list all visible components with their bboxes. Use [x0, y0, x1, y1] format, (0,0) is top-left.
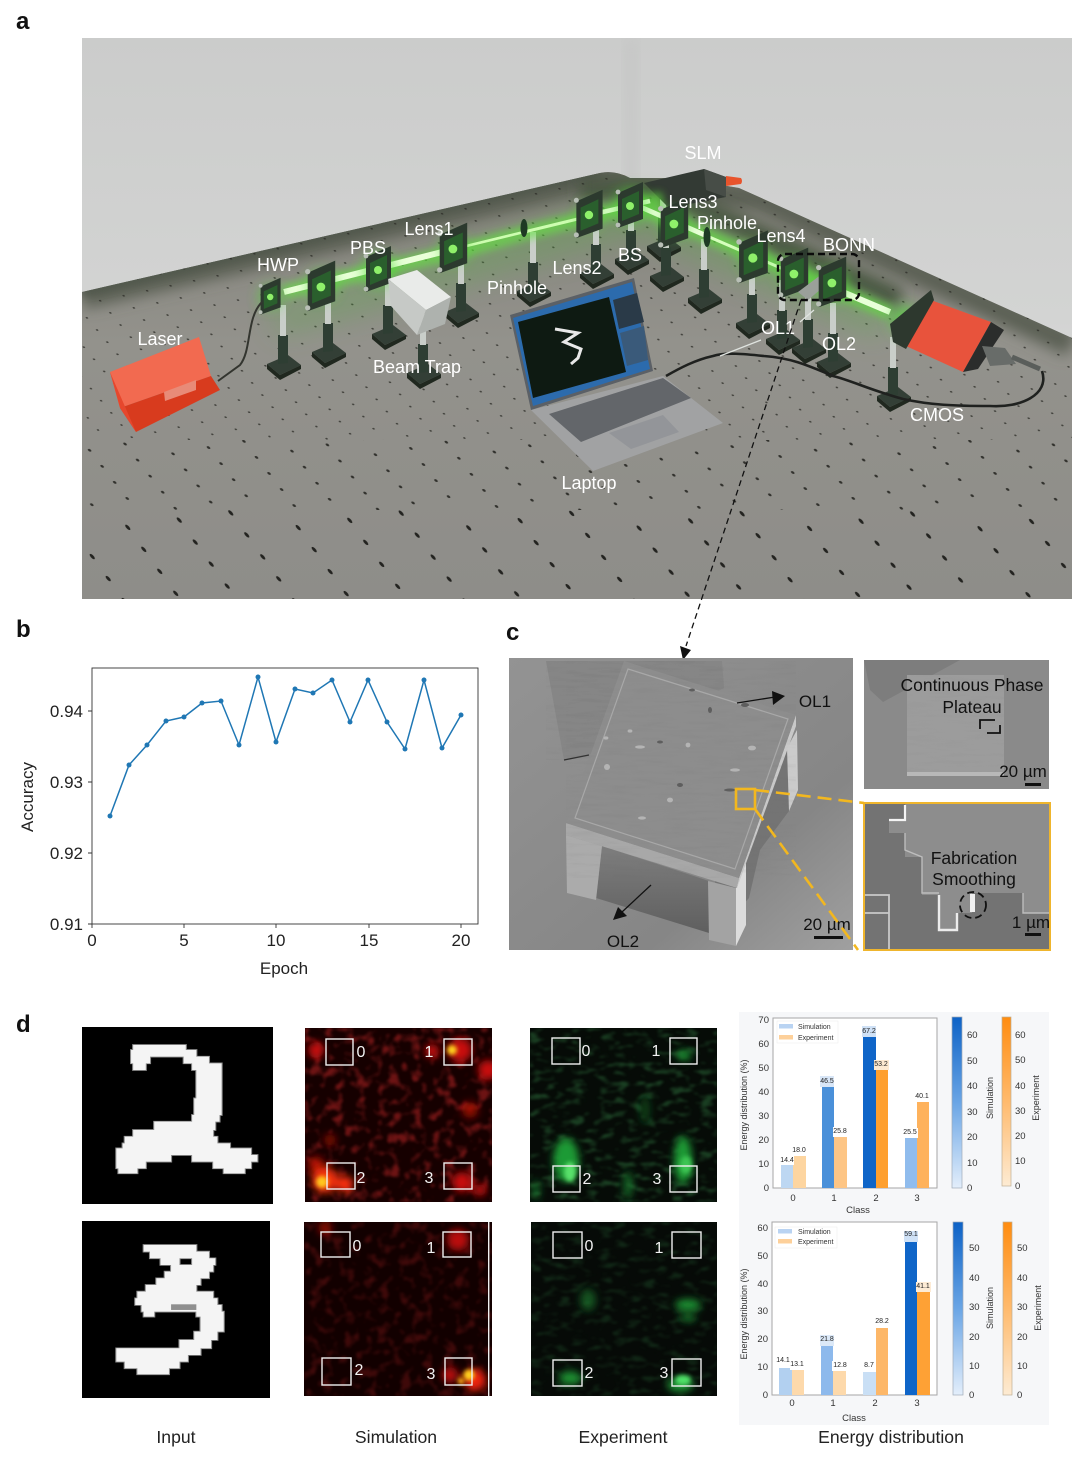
axis ticks: 40 — [757, 1279, 768, 1290]
column captions: Input — [156, 1427, 196, 1447]
panel c: top-right SEM, continuous phase plateau — [864, 660, 1049, 789]
scale bar 20 um: 20 µm — [803, 915, 851, 934]
colorbar experiment: 50 — [1017, 1243, 1028, 1254]
experiment class boxes digit 3: 0 — [585, 1238, 594, 1255]
experiment class boxes digit 3: 1 — [655, 1240, 664, 1257]
fabrication label: Fabrication — [931, 848, 1017, 868]
axis ticks: 10 — [758, 1159, 769, 1170]
colorbar simulation: 50 — [969, 1243, 980, 1254]
x axis tick labels: 0 — [87, 931, 97, 950]
experiment class boxes digit 2: 0 — [582, 1043, 591, 1060]
x axis tick labels: 5 — [179, 931, 189, 950]
scene labels: Laser — [137, 329, 183, 349]
simulation class boxes digit 2 — [326, 1039, 472, 1189]
colorbar simulation: 0 — [969, 1390, 974, 1401]
scene labels: OL1 — [761, 318, 795, 338]
icon: beam trap — [388, 270, 451, 335]
legend: Experiment — [798, 1035, 833, 1042]
simulation class boxes digit 3: 2 — [355, 1362, 364, 1379]
colorbar simulation: 30 — [969, 1302, 980, 1313]
value labels digit 2 — [780, 1026, 929, 1165]
experiment class boxes digit 2: 1 — [652, 1043, 661, 1060]
BONN dashed box — [778, 254, 859, 300]
value labels digit 3: 12.8 — [833, 1362, 847, 1369]
axis ticks: 50 — [757, 1251, 768, 1262]
value labels digit 2: 46.5 — [820, 1078, 834, 1085]
scale bar 20 um: 20 µm — [999, 762, 1047, 781]
icon: laser — [110, 302, 262, 432]
colorbar experiment: Experiment — [1031, 1075, 1041, 1121]
colorbar experiment: 10 — [1015, 1156, 1026, 1167]
colorbar experiment: 30 — [1015, 1106, 1026, 1117]
bar chart: digit 2 energy distribution — [739, 1015, 1041, 1216]
x axis tick labels: 15 — [360, 931, 378, 950]
label OL1: OL1 — [799, 692, 831, 711]
colorbar experiment: 0 — [1017, 1390, 1022, 1401]
axis ticks — [757, 1223, 768, 1401]
icon: SLM — [644, 169, 742, 208]
value labels digit 2: 25.8 — [833, 1128, 847, 1135]
y axis title: Accuracy — [18, 762, 37, 832]
scene labels: PBS — [350, 238, 386, 258]
scene labels: Beam Trap — [373, 357, 461, 377]
value labels digit 2: 25.5 — [903, 1129, 917, 1136]
scene labels: Pinhole — [697, 213, 757, 233]
accuracy line — [108, 674, 464, 818]
colorbar simulation — [952, 1017, 995, 1194]
colorbar experiment: 30 — [1017, 1302, 1028, 1313]
axis ticks: 70 — [758, 1015, 769, 1026]
bar chart: digit 3 energy distribution: Energy distribution (%) — [739, 1268, 749, 1360]
scene labels: Laptop — [561, 473, 617, 493]
panel c: bottom-right SEM inset, fabrication smoothing — [864, 803, 1050, 950]
simulation class boxes digit 3: 0 — [353, 1238, 362, 1255]
optical posts and bases — [267, 187, 911, 412]
colorbar experiment: 40 — [1017, 1273, 1028, 1284]
dashed circle — [960, 892, 986, 918]
colorbar simulation: 10 — [969, 1361, 980, 1372]
plateau label: Plateau — [942, 697, 1002, 717]
column captions — [156, 1427, 964, 1447]
surface debris on chip — [604, 688, 756, 820]
scene labels: CMOS — [910, 405, 964, 425]
plateau label — [900, 675, 1044, 717]
colorbar simulation: 0 — [967, 1183, 972, 1194]
panel label: b: b — [16, 616, 31, 643]
value labels digit 2: 67.2 — [862, 1028, 876, 1035]
colorbar simulation: 60 — [967, 1030, 978, 1041]
axis ticks: 10 — [757, 1362, 768, 1373]
axis ticks: 50 — [758, 1063, 769, 1074]
axis ticks: 20 — [758, 1135, 769, 1146]
colorbar experiment — [1002, 1017, 1041, 1192]
colorbar simulation: Simulation — [985, 1077, 995, 1119]
colorbar experiment — [1003, 1222, 1043, 1401]
axis ticks: 0 — [764, 1183, 769, 1194]
simulation heatmap digit 3 — [304, 1222, 492, 1396]
input digit 2 — [82, 1027, 273, 1204]
experiment heatmap digit 3 — [531, 1222, 717, 1396]
experiment class boxes digit 3: 3 — [660, 1365, 669, 1382]
green laser beam — [284, 199, 890, 313]
simulation class boxes digit 3: 1 — [427, 1240, 436, 1257]
bar chart: digit 2 energy distribution: Energy distribution (%) — [739, 1059, 749, 1151]
x axis title: Epoch — [260, 959, 308, 978]
bar chart: digit 3 energy distribution: Class — [842, 1413, 866, 1424]
value labels digit 2: 14.4 — [780, 1157, 794, 1164]
simulation class boxes digit 2: 2 — [357, 1170, 366, 1187]
legend: Simulation — [798, 1024, 831, 1031]
bar chart: digit 2 energy distribution: Class — [846, 1205, 870, 1216]
axis ticks: 60 — [757, 1223, 768, 1234]
colorbar simulation — [953, 1222, 995, 1401]
y axis tick labels: 0.92 — [50, 844, 83, 863]
colorbar simulation: 40 — [969, 1273, 980, 1284]
simulation class boxes digit 2: 3 — [425, 1170, 434, 1187]
panel label: a: a — [16, 8, 30, 35]
scene labels: BONN — [823, 235, 875, 255]
scene labels: BS — [618, 245, 642, 265]
zoom indicator box and dashed connectors — [736, 789, 864, 950]
colorbar simulation: 30 — [967, 1107, 978, 1118]
simulation class boxes digit 3: 3 — [427, 1366, 436, 1383]
panel a: optical setup scene — [82, 38, 1072, 599]
colorbar experiment: 20 — [1015, 1131, 1026, 1142]
experiment class boxes digit 2: 3 — [653, 1171, 662, 1188]
y axis tick labels: 0.93 — [50, 773, 83, 792]
scale bar 1 um: 1 µm — [1012, 913, 1050, 932]
icon: CMOS camera — [666, 290, 1043, 406]
colorbar simulation: 20 — [967, 1132, 978, 1143]
value labels digit 2: 18.0 — [792, 1147, 806, 1154]
bars digit 2 — [781, 1037, 929, 1188]
colorbar experiment: 0 — [1015, 1181, 1020, 1192]
panel label: c: c — [506, 619, 519, 646]
value labels digit 3: 59.1 — [904, 1231, 918, 1238]
fabrication label: Smoothing — [932, 869, 1016, 889]
colorbar experiment: 60 — [1015, 1030, 1026, 1041]
plateau label: Continuous Phase — [900, 675, 1044, 695]
colorbar simulation: 20 — [969, 1332, 980, 1343]
value labels digit 2: 40.1 — [915, 1093, 929, 1100]
value labels digit 3: 13.1 — [790, 1361, 804, 1368]
label OL2: OL2 — [607, 932, 639, 951]
column captions: Experiment — [579, 1427, 668, 1447]
scene labels: OL2 — [822, 334, 856, 354]
y axis tick labels — [50, 702, 83, 934]
scene labels: Lens2 — [552, 258, 602, 278]
y axis tick labels: 0.94 — [50, 702, 83, 721]
experiment class boxes digit 2 — [552, 1038, 697, 1192]
value labels digit 3 — [776, 1231, 931, 1372]
scene labels — [137, 143, 964, 493]
arrow to OL1 — [737, 691, 785, 705]
axis ticks: 20 — [757, 1334, 768, 1345]
panel label: d: d — [16, 1011, 31, 1038]
bar chart: digit 3 energy distribution — [739, 1222, 1043, 1424]
bars digit 3 — [779, 1242, 930, 1395]
fabrication label — [931, 848, 1017, 889]
legend — [777, 1021, 838, 1043]
panel d: energy distribution background — [739, 1012, 1049, 1425]
legend — [775, 1227, 837, 1248]
bar chart: digit 3 energy distribution: 3 — [914, 1398, 920, 1409]
value labels digit 3: 14.1 — [776, 1357, 790, 1364]
value labels digit 3: 28.2 — [875, 1318, 889, 1325]
scene labels: Lens1 — [404, 219, 454, 239]
axis ticks: 30 — [758, 1111, 769, 1122]
colorbar experiment: 50 — [1015, 1055, 1026, 1066]
arrow to OL2 — [613, 885, 651, 920]
axis ticks — [758, 1015, 769, 1194]
panel b: accuracy line chart — [18, 668, 478, 978]
simulation class boxes digit 2: 1 — [425, 1044, 434, 1061]
legend: Simulation — [798, 1229, 831, 1236]
scene labels: HWP — [257, 255, 299, 275]
x axis tick labels: 10 — [267, 931, 285, 950]
optical mounts — [259, 182, 919, 334]
colorbar simulation: 50 — [967, 1056, 978, 1067]
input digit 3 — [82, 1221, 270, 1398]
colorbar experiment: 40 — [1015, 1081, 1026, 1092]
colorbar simulation: Simulation — [985, 1287, 995, 1329]
panel c: main SEM image — [509, 658, 853, 951]
bar chart: digit 2 energy distribution: 2 — [873, 1193, 879, 1204]
bar chart: digit 2 energy distribution: 0 — [790, 1193, 796, 1204]
scene labels: Pinhole — [487, 278, 547, 298]
value labels digit 3: 41.1 — [916, 1283, 930, 1290]
value labels digit 3: 21.8 — [820, 1336, 834, 1343]
column captions: Simulation — [355, 1427, 437, 1447]
column captions: Energy distribution — [818, 1427, 964, 1447]
colorbar simulation: 10 — [967, 1158, 978, 1169]
experiment class boxes digit 3: 2 — [585, 1365, 594, 1382]
simulation class boxes digit 3 — [321, 1232, 472, 1385]
colorbar experiment: 10 — [1017, 1361, 1028, 1372]
y axis tick labels: 0.91 — [50, 915, 83, 934]
axis ticks: 40 — [758, 1087, 769, 1098]
scene labels: Lens3 — [668, 192, 718, 212]
scene labels: SLM — [684, 143, 722, 163]
colorbar experiment: Experiment — [1033, 1285, 1043, 1331]
bar chart: digit 3 energy distribution: 0 — [789, 1398, 795, 1409]
experiment heatmap digit 2 — [530, 1028, 717, 1202]
bar chart: digit 2 energy distribution: 3 — [914, 1193, 920, 1204]
legend: Experiment — [798, 1239, 833, 1246]
x axis tick labels — [87, 931, 470, 950]
experiment class boxes digit 2: 2 — [583, 1171, 592, 1188]
scene labels: Lens4 — [756, 226, 806, 246]
bar chart: digit 2 energy distribution: 1 — [831, 1193, 837, 1204]
bar chart: digit 3 energy distribution: 2 — [872, 1398, 878, 1409]
axis ticks: 0 — [763, 1390, 768, 1401]
icon: laptop — [510, 278, 723, 471]
dashed arrow from BONN to panel c — [680, 300, 801, 660]
experiment class boxes digit 3 — [553, 1232, 701, 1386]
value labels digit 3: 8.7 — [864, 1362, 874, 1369]
axis ticks: 60 — [758, 1039, 769, 1050]
bar chart: digit 3 energy distribution: 1 — [830, 1398, 836, 1409]
colorbar experiment: 20 — [1017, 1332, 1028, 1343]
axis ticks: 30 — [757, 1306, 768, 1317]
bracket marker — [980, 720, 1000, 733]
x axis tick labels: 20 — [452, 931, 470, 950]
colorbar simulation: 40 — [967, 1081, 978, 1092]
simulation class boxes digit 2: 0 — [357, 1044, 366, 1061]
simulation heatmap digit 2 — [305, 1028, 492, 1202]
value labels digit 2: 53.2 — [874, 1061, 888, 1068]
